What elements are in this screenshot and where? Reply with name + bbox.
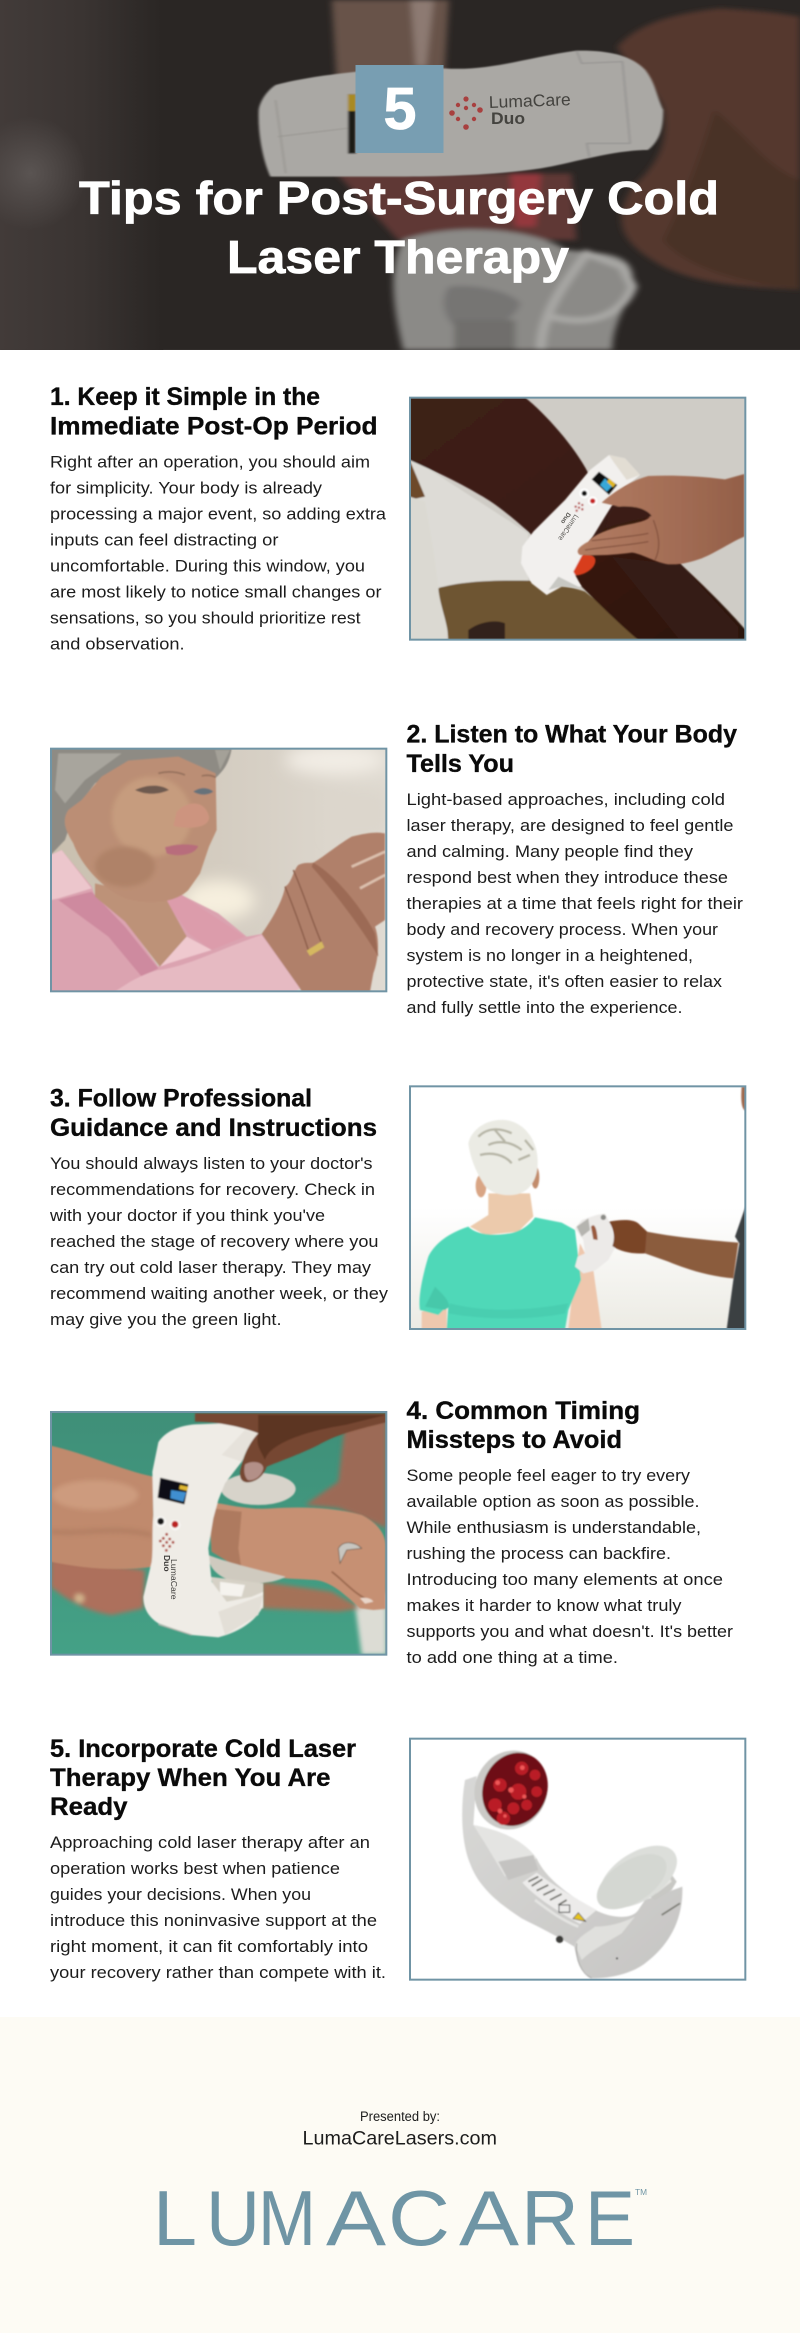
logo: LumaCare wordmark: A bbox=[459, 2174, 519, 2262]
text block: tip 2: and calming. Many people find they bbox=[406, 842, 694, 861]
text block: tip 1 bbox=[50, 452, 387, 654]
heading: tip 3: Guidance and Instructions bbox=[50, 1114, 377, 1142]
heading: tip 5 bbox=[50, 1735, 356, 1821]
text block: tip 4 bbox=[406, 1466, 733, 1667]
arms bbox=[422, 1307, 447, 1329]
text block: tip 5: introduce this noninvasive support at the bbox=[50, 1911, 377, 1930]
heading: tip 2: Tells You bbox=[406, 750, 514, 778]
text block: tip 2: laser therapy, are designed to feel gentle bbox=[406, 816, 734, 835]
text block: tip 4: Some people feel eager to try every bbox=[406, 1466, 691, 1485]
device body bbox=[462, 1776, 682, 1978]
text block: tip 3: may give you the green light. bbox=[50, 1310, 282, 1329]
logo: LumaCare wordmark: M bbox=[258, 2174, 316, 2262]
heading: tip 5: Therapy When You Are bbox=[50, 1764, 331, 1792]
text block: tip 3: recommendations for recovery. Check in bbox=[50, 1180, 375, 1199]
text block: tip 1: Right after an operation, you should aim bbox=[50, 452, 370, 472]
display bbox=[158, 1478, 188, 1504]
photo: device on wrist close-up bbox=[51, 1412, 387, 1655]
photo: device on dark arm bbox=[410, 397, 746, 640]
thumb / hand on top bbox=[195, 1413, 386, 1482]
shirt bbox=[51, 850, 300, 992]
hands bbox=[262, 833, 385, 992]
text block: tip 1: and observation. bbox=[50, 634, 184, 654]
device bbox=[259, 51, 663, 177]
device body bbox=[521, 455, 640, 595]
leg bbox=[332, 0, 449, 83]
logo: LumaCare wordmark bbox=[153, 2174, 647, 2262]
heading: tip 1 bbox=[50, 383, 378, 440]
text block: tip 2: protective state, it's often easier to relax bbox=[406, 972, 723, 991]
text block: tip 1: are most likely to notice small changes or bbox=[50, 582, 382, 602]
text block: tip 1: for simplicity. Your body is already bbox=[50, 478, 323, 498]
panel: hero bbox=[0, 0, 800, 350]
text block: tip 3: You should always listen to your doctor's bbox=[50, 1154, 372, 1173]
text block: tip 2: body and recovery process. When your bbox=[406, 920, 718, 939]
logo: LumaCare wordmark: L bbox=[153, 2174, 197, 2262]
text block: tip 1: uncomfortable. During this window, you bbox=[50, 556, 365, 576]
panel: tip 4 bbox=[51, 1397, 733, 1667]
text block: tip 2: and fully settle into the experience. bbox=[406, 998, 682, 1017]
text block: tip 1: inputs can feel distracting or bbox=[50, 530, 279, 550]
text block: tip 4: Introducing too many elements at once bbox=[406, 1570, 723, 1589]
hair bbox=[51, 748, 232, 855]
hand bbox=[617, 8, 800, 290]
number badge: 5 bbox=[384, 76, 416, 142]
text block: tip 2: Light-based approaches, including cold bbox=[406, 790, 725, 809]
device label text bbox=[164, 1556, 177, 1600]
hand bbox=[578, 474, 744, 564]
neck bbox=[470, 1193, 533, 1235]
number badge bbox=[356, 65, 444, 153]
device label text: LumaCare bbox=[169, 1559, 178, 1600]
text block: tip 5: your recovery rather than compete with it. bbox=[50, 1963, 386, 1982]
panel: footer bbox=[0, 2017, 800, 2333]
text block: tip 5: guides your decisions. When you bbox=[50, 1885, 311, 1904]
heading: tip 1: 1. Keep it Simple in the bbox=[50, 383, 320, 411]
device label text bbox=[558, 512, 579, 540]
hero device label bbox=[488, 90, 571, 128]
text block: tip 3: recommend waiting another week, or they bbox=[50, 1284, 389, 1303]
buttons bbox=[155, 1516, 166, 1527]
text block: tip 4: supports you and what doesn't. It's better bbox=[406, 1622, 733, 1641]
text block: tip 2: respond best when they introduce these bbox=[406, 868, 728, 887]
text block: tip 2: system is no longer in a heightened, bbox=[406, 946, 693, 965]
text block: tip 5: right moment, it can fit comfortably into bbox=[50, 1937, 368, 1956]
photo: device on woman's shoulder bbox=[410, 1086, 746, 1329]
photo: gray laser device with red lens bbox=[410, 1738, 746, 1980]
device body bbox=[143, 1423, 263, 1637]
right pad bbox=[645, 1870, 677, 1900]
text block: tip 2: therapies at a time that feels right for their bbox=[406, 894, 743, 913]
hair bbox=[468, 1120, 538, 1195]
text block: tip 5 bbox=[50, 1833, 386, 1982]
text block: tip 2 bbox=[406, 790, 743, 1017]
device label text: Duo bbox=[559, 511, 572, 525]
text block: tip 5: operation works best when patience bbox=[50, 1859, 340, 1878]
text block: tip 4: While enthusiasm is understandable, bbox=[406, 1518, 701, 1537]
jack bbox=[556, 1936, 563, 1943]
heading: tip 3: 3. Follow Professional bbox=[50, 1084, 312, 1112]
shirt bbox=[419, 1217, 581, 1329]
logo: LumaCare wordmark: C bbox=[388, 2174, 450, 2262]
heading: tip 1: Immediate Post-Op Period bbox=[50, 412, 378, 440]
heading: tip 4: Missteps to Avoid bbox=[406, 1426, 622, 1454]
hero background photo: device on ankle bbox=[0, 0, 800, 350]
helper shirt bbox=[727, 1206, 746, 1329]
text block: tip 3 bbox=[49, 1154, 389, 1329]
device label text: Duo bbox=[162, 1555, 171, 1572]
hero device logo mark bbox=[449, 96, 483, 130]
text block: tip 3: with your doctor if you think you've bbox=[49, 1206, 325, 1225]
text block: tip 1: sensations, so you should prioritize rest bbox=[50, 608, 361, 628]
panel: tip 3 bbox=[49, 1084, 746, 1329]
bottom pad bbox=[208, 1555, 286, 1583]
text block: tip 5: Approaching cold laser therapy after an bbox=[50, 1833, 370, 1852]
text block: tip 4: rushing the process can backfire. bbox=[406, 1544, 671, 1563]
panel: tip 5 bbox=[50, 1735, 746, 1982]
heading: tip 3 bbox=[50, 1084, 377, 1142]
text block: tip 3: can try out cold laser therapy. They may bbox=[50, 1258, 372, 1277]
text block: tip 3: reached the stage of recovery where you bbox=[50, 1232, 378, 1251]
website: LumaCareLasers.com bbox=[302, 2128, 497, 2150]
heading: tip 2: 2. Listen to What Your Body bbox=[406, 720, 737, 748]
panel: tip 2 bbox=[51, 720, 743, 1017]
forearm bbox=[51, 1446, 153, 1569]
text block: tip 1: processing a major event, so adding extra bbox=[50, 504, 387, 524]
panel: tip 1 bbox=[50, 383, 746, 654]
label bbox=[522, 1873, 597, 1924]
logo: LumaCare wordmark: R bbox=[521, 2174, 579, 2262]
title: Laser Therapy bbox=[227, 231, 569, 283]
device label text: LumaCare bbox=[556, 513, 581, 543]
heading: tip 4: 4. Common Timing bbox=[406, 1397, 640, 1425]
device bbox=[575, 1213, 616, 1273]
text block: tip 4: available option as soon as possible. bbox=[406, 1492, 700, 1511]
heading: tip 5: 5. Incorporate Cold Laser bbox=[50, 1735, 356, 1763]
back of hand bbox=[208, 1502, 386, 1610]
helper hand and forearm bbox=[591, 1225, 598, 1240]
heading: tip 5: Ready bbox=[50, 1793, 128, 1821]
presented by: Presented by: bbox=[360, 2109, 440, 2124]
logo: LumaCare wordmark: TM bbox=[635, 2188, 647, 2197]
LEDs bbox=[488, 1762, 542, 1825]
red laser pad bbox=[572, 554, 596, 576]
face bbox=[65, 757, 217, 902]
neck bbox=[95, 883, 187, 967]
text block: tip 4: makes it harder to know what truly bbox=[406, 1596, 682, 1615]
heading: tip 2 bbox=[406, 720, 737, 778]
heading: tip 4 bbox=[406, 1397, 640, 1454]
title: Tips for Post-Surgery Cold bbox=[79, 172, 719, 224]
text block: tip 4: to add one thing at a time. bbox=[406, 1648, 618, 1667]
logo: LumaCare wordmark: U bbox=[206, 2174, 260, 2262]
lens ring bbox=[463, 1739, 559, 1841]
hero device label: LumaCare bbox=[488, 90, 571, 112]
photo: older woman looking at wrist bbox=[51, 745, 388, 992]
logo: LumaCare wordmark: E bbox=[585, 2174, 635, 2262]
title bbox=[79, 172, 719, 283]
shoe bbox=[393, 230, 633, 350]
top pad bbox=[221, 1473, 296, 1505]
hero device label: Duo bbox=[491, 109, 525, 128]
logo: LumaCare wordmark: A bbox=[326, 2174, 386, 2262]
